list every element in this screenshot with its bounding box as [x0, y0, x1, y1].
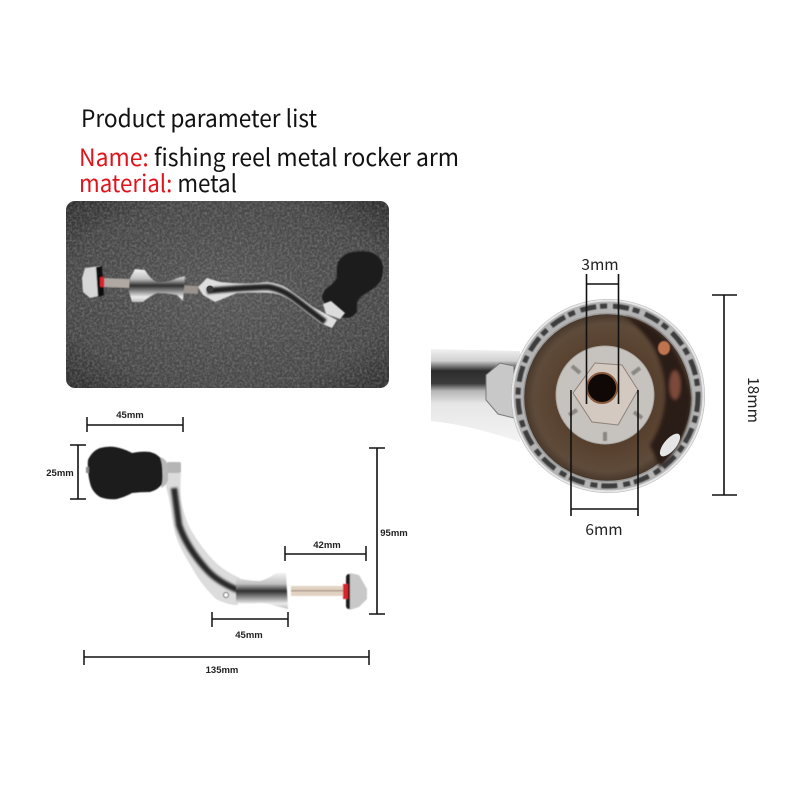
- dimension: knob offset 45mm: [87, 410, 183, 432]
- icon: foam knob in photo: [322, 251, 383, 318]
- spec: material: material: metal: [79, 164, 237, 199]
- icon: centre hole: [587, 373, 617, 403]
- icon: cap nut: [350, 573, 367, 610]
- icon: broken rim glint: [656, 430, 684, 460]
- dimension: shaft 42mm: 42mm: [313, 540, 341, 551]
- icon: washer notches: [569, 366, 642, 441]
- icon: crank arm: [166, 473, 240, 605]
- panel: product photo on dark background: [66, 201, 389, 388]
- icon: pivot hole: [224, 592, 228, 598]
- photo: side view of the rocker arm: [86, 447, 367, 610]
- photo: close-up of the arm socket: [420, 299, 705, 493]
- icon: shaft highlight: [291, 590, 344, 592]
- spec: name: Name: fishing reel metal rocker arm: [79, 138, 459, 173]
- icon: toothed washer: [556, 346, 654, 444]
- dimension: socket diameter 18mm: 18mm: [743, 377, 765, 423]
- icon: ring highlight: [512, 300, 704, 492]
- icon: arm stub: [431, 349, 520, 442]
- icon: shaft in photo: [103, 278, 198, 294]
- icon: black washer: [346, 574, 352, 609]
- dimension: bore 3mm: 3mm: [581, 253, 619, 275]
- dimension: knob diameter 25mm: 25mm: [46, 468, 74, 479]
- icon: foam knob: [88, 447, 163, 499]
- dimension: shaft 42mm: [285, 540, 366, 561]
- dimension: hex 6mm: 6mm: [585, 518, 623, 540]
- dimension: knob offset 45mm: 45mm: [116, 410, 144, 421]
- title: Product parameter list: [81, 99, 317, 134]
- icon: sleeve: [236, 573, 288, 609]
- icon: ring dark band: [518, 306, 698, 486]
- dimension: sleeve 45mm: [212, 612, 288, 641]
- icon: hex nut: [573, 363, 638, 425]
- dimension: overall width 135mm: 135mm: [206, 665, 238, 676]
- icon: arm joint: [486, 363, 514, 418]
- icon: crank arm in photo: [198, 278, 337, 328]
- icon: arm top cap: [167, 462, 181, 473]
- icon: knob collar: [160, 457, 168, 488]
- icon: brown cup interior: [524, 314, 692, 482]
- icon: cup reflection: [625, 316, 691, 468]
- icon: sleeve in photo: [129, 269, 185, 302]
- icon: cap nut in photo: [82, 266, 104, 298]
- icon: knob bolt end: [86, 467, 89, 473]
- icon: red glint: [669, 370, 681, 400]
- dimension: height 95mm: 95mm: [380, 528, 408, 539]
- icon: orange glint: [658, 341, 670, 355]
- dimension: knob diameter 25mm: [46, 445, 86, 499]
- icon: red washer: [343, 584, 348, 599]
- icon: arm dark reflection: [174, 488, 238, 590]
- dimension: sleeve 45mm: 45mm: [235, 630, 263, 641]
- icon: outer chrome ring: [511, 299, 705, 493]
- icon: knob base in photo: [323, 301, 345, 319]
- icon: threaded shaft: [291, 586, 344, 596]
